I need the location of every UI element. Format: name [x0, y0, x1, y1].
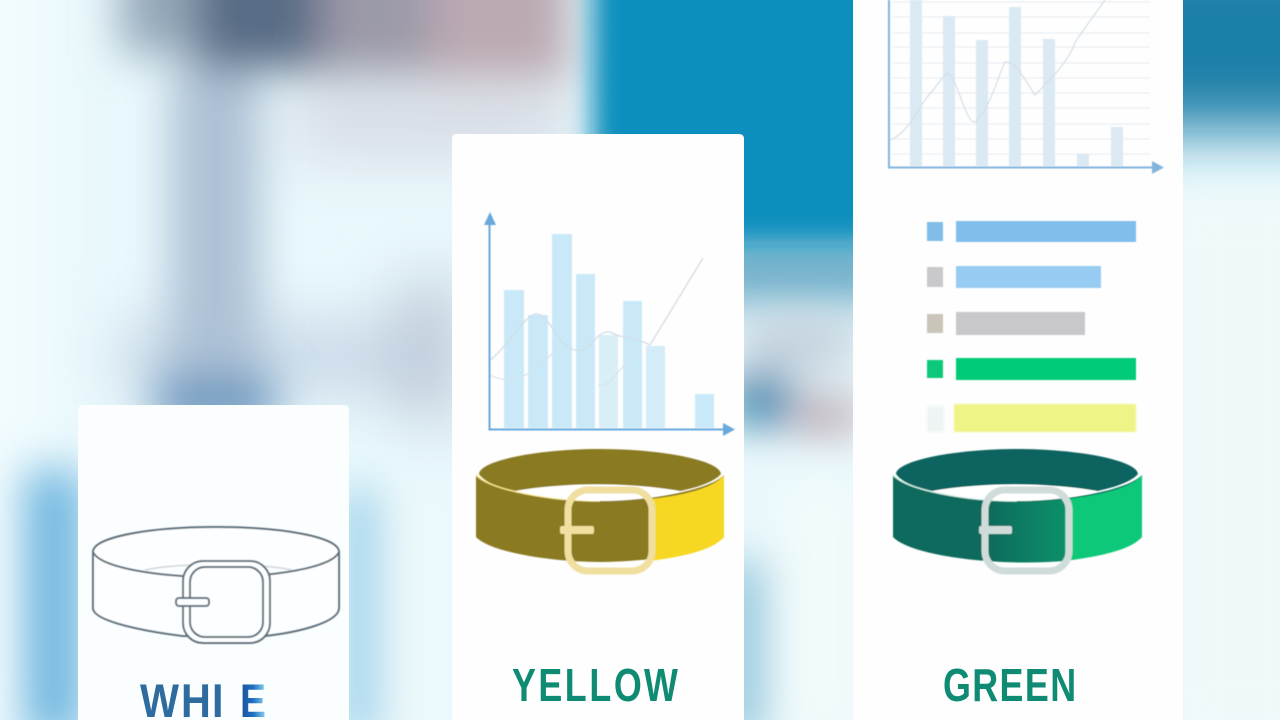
icon: yellow belt — [476, 449, 724, 571]
legend bars — [927, 221, 1136, 432]
label: green: GREEN — [943, 660, 1076, 711]
panel: white belt card — [78, 405, 349, 720]
icon: white belt — [93, 527, 339, 643]
label: yellow: YELLOW — [512, 660, 678, 711]
icon: green belt — [893, 449, 1142, 571]
bar chart: yellow card — [484, 212, 735, 436]
label: white — [140, 674, 266, 720]
bar chart: green card — [889, 0, 1164, 174]
panel: yellow belt card — [452, 134, 744, 720]
panel: green belt card — [853, 0, 1183, 720]
